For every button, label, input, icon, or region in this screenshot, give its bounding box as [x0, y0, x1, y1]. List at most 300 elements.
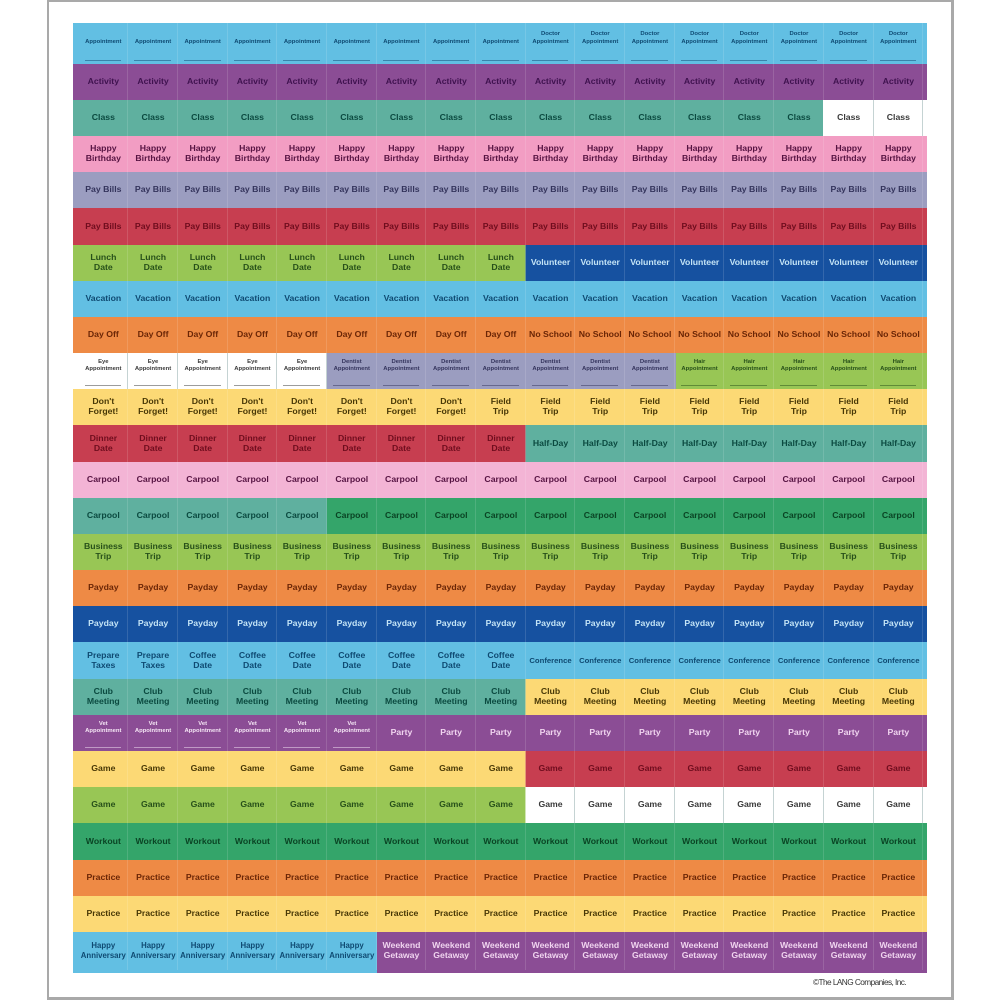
row: Appointment and Doctor Appointment: Appointment	[334, 39, 370, 45]
row: Appointment and Doctor Appointment: Doctor	[889, 31, 908, 37]
row: Eye, Dentist and Hair Appointment: Eye	[148, 359, 158, 365]
row: Lunch Date and Volunteer: Lunch	[90, 252, 116, 262]
row: Pay Bills red: Pay Bills	[284, 221, 320, 231]
row: Dinner Date and Half-Day: Date	[243, 442, 262, 452]
row: Appointment and Doctor Appointment: Appointment	[383, 39, 420, 45]
row: Vacation: Vacation	[533, 293, 568, 303]
row: Class: Class	[489, 112, 512, 122]
row: Practice orange: Practice	[583, 872, 617, 882]
row: Prepare Taxes, Coffee Date and Conference	[73, 642, 927, 679]
row: Pay Bills lavender: Pay Bills	[781, 184, 817, 194]
row: Appointment and Doctor Appointment: Doctor	[740, 31, 759, 37]
row: Day Off and No School: No School	[877, 329, 920, 339]
row: Class: Class	[638, 112, 662, 122]
row: Practice orange: Practice	[881, 872, 915, 882]
row: Carpool teal and green: Carpool	[87, 510, 120, 520]
row: Class: Class	[191, 112, 214, 122]
row: Happy Birthday: Birthday	[732, 153, 767, 163]
row: Happy Birthday: Happy	[537, 143, 564, 153]
row: Prepare Taxes, Coffee Date and Conference: Taxes	[91, 660, 115, 670]
row: Lunch Date and Volunteer: Date	[144, 262, 162, 272]
row: Business Trip: Trip	[294, 551, 310, 561]
row: Appointment and Doctor Appointment: Doctor	[839, 31, 858, 37]
row: Business Trip: Business	[332, 541, 371, 551]
row: Club Meeting: Meeting	[633, 696, 666, 706]
row: Lunch Date and Volunteer: Date	[342, 262, 361, 272]
row: Payday orange: Payday	[436, 582, 466, 592]
row: Don't Forget and Field Trip: Forget!	[138, 406, 168, 416]
row: Dinner Date and Half-Day: Dinner	[139, 433, 167, 443]
row: Payday blue: Payday	[535, 618, 566, 628]
row: Club Meeting: Club	[690, 686, 709, 696]
row: Eye, Dentist and Hair Appointment	[73, 353, 927, 389]
row: Happy Anniversary and Weekend Getaway: Anniversary	[81, 951, 126, 960]
row: Don't Forget and Field Trip: Don't	[391, 396, 412, 406]
row: Practice orange: Practice	[434, 872, 468, 882]
row: Game green and white: Game	[439, 799, 463, 809]
row: Game yellow and red: Game	[588, 763, 612, 773]
row: Lunch Date and Volunteer: Lunch	[488, 252, 514, 262]
row: Day Off and No School: No School	[777, 329, 820, 339]
row: Dinner Date and Half-Day: Date	[342, 442, 361, 452]
row: Dinner Date and Half-Day: Date	[144, 442, 162, 452]
row: Happy Birthday: Birthday	[434, 153, 469, 163]
row: Class: Class	[787, 112, 811, 122]
row: Prepare Taxes, Coffee Date and Conference: Conference	[678, 656, 721, 665]
row: Activity: Activity	[734, 76, 765, 86]
row: Happy Anniversary and Weekend Getaway: Getaway	[880, 950, 916, 960]
row: Don't Forget and Field Trip: Field	[590, 396, 610, 406]
row: Lunch Date and Volunteer: Lunch	[339, 252, 365, 262]
row: Club Meeting: Club	[243, 686, 262, 696]
row: Practice yellow: Practice	[434, 908, 468, 918]
row: Happy Anniversary and Weekend Getaway: Getaway	[384, 950, 419, 960]
row: Workout: Workout	[135, 836, 171, 846]
row: Workout: Workout	[434, 836, 469, 846]
row: Happy Anniversary and Weekend Getaway: Getaway	[731, 950, 767, 960]
row: Vacation	[73, 281, 927, 317]
row: Payday orange	[73, 570, 927, 606]
row: Game green and white: Game	[837, 799, 861, 809]
row: Business Trip: Business	[134, 541, 172, 551]
row: Game green and white: Game	[538, 799, 563, 809]
row: Game yellow and red: Game	[191, 763, 215, 773]
row: Dinner Date and Half-Day: Date	[193, 442, 212, 452]
row: Vet Appointment and Party: Vet	[298, 721, 306, 727]
row: Practice orange: Practice	[385, 872, 418, 882]
row: Prepare Taxes, Coffee Date and Conference: Prepare	[87, 650, 120, 660]
row: Vet Appointment and Party: Party	[540, 727, 561, 737]
row: Lunch Date and Volunteer: Lunch	[239, 252, 265, 262]
row: Dinner Date and Half-Day: Dinner	[189, 433, 216, 443]
row: Happy Anniversary and Weekend Getaway: Weekend	[830, 940, 868, 950]
row: Workout: Workout	[831, 836, 866, 846]
row: Happy Anniversary and Weekend Getaway: Weekend	[631, 940, 669, 950]
row: Prepare Taxes, Coffee Date and Conference: Date	[491, 660, 510, 670]
row: Class: Class	[340, 112, 363, 122]
row: Business Trip: Business	[482, 541, 520, 551]
row: Day Off and No School: No School	[529, 329, 572, 339]
row: Appointment and Doctor Appointment: Appointment	[135, 39, 171, 45]
row: Workout: Workout	[86, 836, 121, 846]
row: Lunch Date and Volunteer: Volunteer	[630, 257, 670, 267]
row: Payday blue: Payday	[88, 618, 119, 628]
row: Club Meeting: Club	[889, 686, 908, 696]
row: Practice yellow: Practice	[136, 908, 170, 918]
row: Happy Anniversary and Weekend Getaway: Happy	[141, 941, 165, 950]
row: Pay Bills lavender: Pay Bills	[632, 184, 668, 194]
row: Carpool teal and green: Carpool	[435, 510, 468, 520]
row: Happy Birthday: Happy	[239, 143, 266, 153]
row: Prepare Taxes, Coffee Date and Conference: Taxes	[141, 660, 165, 670]
row: Appointment and Doctor Appointment	[73, 23, 927, 64]
row: Carpool teal and green: Carpool	[783, 510, 815, 520]
row: Appointment and Doctor Appointment: Appointment	[830, 38, 867, 44]
row: Happy Birthday: Birthday	[583, 153, 618, 163]
row: Don't Forget and Field Trip: Forget!	[88, 406, 118, 416]
row: Don't Forget and Field Trip: Trip	[791, 406, 807, 416]
row: Vet Appointment and Party: Appointment	[135, 728, 171, 734]
row: Appointment and Doctor Appointment: Appointment	[483, 39, 519, 45]
copyright: ©The LANG Companies, Inc.	[813, 977, 906, 987]
row: Appointment and Doctor Appointment: Appointment	[681, 38, 718, 44]
row: Payday orange: Payday	[337, 582, 367, 592]
row: Lunch Date and Volunteer: Volunteer	[779, 257, 819, 267]
row: Eye, Dentist and Hair Appointment: Appointment	[781, 366, 817, 372]
row: Eye, Dentist and Hair Appointment: Dentist	[640, 359, 660, 365]
row: Game green and white: Game	[389, 799, 414, 809]
row: Club Meeting: Meeting	[832, 696, 865, 706]
row: Club Meeting: Meeting	[882, 696, 915, 706]
row: Eye, Dentist and Hair Appointment: Hair	[893, 359, 904, 365]
row: Happy Anniversary and Weekend Getaway: Getaway	[831, 950, 867, 960]
row: Game yellow and red: Game	[340, 763, 364, 773]
row: Practice yellow: Practice	[832, 908, 866, 918]
row: Happy Anniversary and Weekend Getaway: Getaway	[682, 950, 717, 960]
row: Lunch Date and Volunteer: Lunch	[289, 252, 315, 262]
row: Club Meeting: Club	[541, 686, 560, 696]
row: Payday blue: Payday	[337, 618, 367, 628]
row: Eye, Dentist and Hair Appointment: Hair	[694, 359, 705, 365]
row: Business Trip: Trip	[344, 551, 360, 561]
row: Club Meeting: Meeting	[385, 696, 418, 706]
row: Activity: Activity	[286, 76, 318, 86]
row: Business Trip: Trip	[145, 551, 161, 561]
row: Business Trip: Trip	[841, 551, 857, 561]
row: Happy Birthday: Birthday	[334, 153, 369, 163]
row: Don't Forget and Field Trip: Forget!	[237, 406, 267, 416]
row: Vet Appointment and Party: Appointment	[284, 728, 320, 734]
row: Carpool teal and green: Carpool	[633, 510, 666, 520]
row: Pay Bills red: Pay Bills	[85, 221, 121, 231]
row: Eye, Dentist and Hair Appointment: Appointment	[85, 366, 122, 372]
row: Prepare Taxes, Coffee Date and Conference: Conference	[778, 656, 820, 665]
row: Club Meeting: Club	[193, 686, 212, 696]
row: Eye, Dentist and Hair Appointment: Dentist	[441, 359, 461, 365]
row: Vet Appointment and Party: Vet	[248, 721, 257, 727]
row: Payday blue: Payday	[287, 618, 317, 628]
row: Workout: Workout	[682, 836, 717, 846]
row: Pay Bills red: Pay Bills	[483, 221, 519, 231]
row: Club Meeting: Meeting	[335, 696, 368, 706]
row: Practice orange: Practice	[335, 872, 369, 882]
row: Lunch Date and Volunteer: Date	[94, 262, 113, 272]
row: Class: Class	[141, 112, 165, 122]
row: Activity: Activity	[137, 76, 169, 86]
row: Don't Forget and Field Trip: Field	[839, 396, 859, 406]
row: Appointment and Doctor Appointment: Appointment	[532, 38, 569, 44]
row: Payday blue: Payday	[138, 618, 168, 628]
row: Pay Bills red	[73, 208, 927, 245]
row: Business Trip	[73, 534, 927, 570]
row: Business Trip: Business	[581, 541, 620, 551]
row: Don't Forget and Field Trip: Trip	[741, 406, 757, 416]
row: Game yellow and red: Game	[489, 763, 513, 773]
row: Happy Birthday: Birthday	[632, 153, 668, 163]
row: Club Meeting: Meeting	[286, 696, 318, 706]
row: Business Trip: Business	[879, 541, 918, 551]
row: Business Trip: Business	[183, 541, 222, 551]
row: Happy Anniversary and Weekend Getaway: Happy	[340, 941, 364, 950]
row: Don't Forget and Field Trip: Don't	[440, 396, 462, 406]
row: Vet Appointment and Party: Party	[440, 727, 462, 737]
row: Payday orange: Payday	[635, 582, 665, 592]
row: Business Trip: Trip	[443, 551, 459, 561]
row: Activity: Activity	[585, 76, 616, 86]
row: Carpool pink: Carpool	[186, 474, 219, 484]
row: Practice orange: Practice	[86, 872, 120, 882]
row: Pay Bills lavender: Pay Bills	[234, 184, 271, 194]
row: Game green and white: Game	[340, 799, 364, 809]
row: Pay Bills lavender: Pay Bills	[831, 184, 867, 194]
row: Carpool teal and green: Carpool	[832, 510, 865, 520]
row: Vet Appointment and Party: Party	[738, 727, 760, 737]
row: Don't Forget and Field Trip: Forget!	[188, 406, 218, 416]
row: Vacation: Vacation	[731, 293, 767, 303]
row: Activity: Activity	[833, 76, 864, 86]
row: Business Trip: Trip	[642, 551, 658, 561]
row: Pay Bills lavender: Pay Bills	[334, 184, 370, 194]
row: Eye, Dentist and Hair Appointment: Appointment	[185, 366, 221, 372]
row: Day Off and No School: No School	[827, 329, 870, 339]
row: Class: Class	[688, 112, 711, 122]
row: Business Trip: Business	[84, 541, 123, 551]
row: Happy Birthday: Birthday	[831, 153, 866, 163]
row: Prepare Taxes, Coffee Date and Conference: Conference	[629, 656, 671, 665]
row: Lunch Date and Volunteer: Lunch	[438, 252, 464, 262]
row: Prepare Taxes, Coffee Date and Conference: Coffee	[487, 650, 514, 660]
row: Carpool pink: Carpool	[87, 474, 120, 484]
row: Pay Bills red: Pay Bills	[135, 221, 171, 231]
row: Game yellow and red: Game	[439, 763, 463, 773]
row: Prepare Taxes, Coffee Date and Conference: Conference	[529, 656, 572, 665]
row: Business Trip: Business	[531, 541, 570, 551]
row: Payday orange: Payday	[535, 582, 566, 592]
row: Happy Anniversary and Weekend Getaway: Weekend	[681, 940, 719, 950]
row: Workout: Workout	[483, 836, 518, 846]
row: Don't Forget and Field Trip: Don't	[142, 396, 164, 406]
row: Club Meeting: Club	[143, 686, 163, 696]
row: Don't Forget and Field Trip: Field	[888, 396, 908, 406]
row: Vet Appointment and Party: Party	[589, 727, 611, 737]
row: Payday blue: Payday	[635, 618, 665, 628]
row: Club Meeting: Meeting	[435, 696, 468, 706]
row: Club Meeting: Club	[342, 686, 361, 696]
row: Practice orange: Practice	[534, 872, 567, 882]
row: Class: Class	[738, 112, 761, 122]
row: Practice yellow: Practice	[732, 908, 766, 918]
row: Activity: Activity	[237, 76, 268, 86]
row: Carpool teal and green: Carpool	[286, 510, 318, 520]
row: Workout: Workout	[632, 836, 667, 846]
row: Workout: Workout	[334, 836, 369, 846]
row: Carpool pink: Carpool	[683, 474, 716, 484]
row: Happy Birthday: Happy	[686, 143, 713, 153]
row: Practice orange: Practice	[832, 872, 866, 882]
row: Pay Bills red: Pay Bills	[632, 221, 668, 231]
row: Prepare Taxes, Coffee Date and Conference: Date	[193, 660, 212, 670]
row: Appointment and Doctor Appointment: Doctor	[789, 31, 808, 37]
row: Prepare Taxes, Coffee Date and Conference: Date	[293, 660, 312, 670]
row: Game green and white: Game	[240, 799, 264, 809]
row: Lunch Date and Volunteer: Lunch	[190, 252, 216, 262]
row: Prepare Taxes, Coffee Date and Conference: Coffee	[338, 650, 365, 660]
row: Day Off and No School: Day Off	[336, 329, 367, 339]
row: Class: Class	[440, 112, 463, 122]
row: Vet Appointment and Party: Party	[788, 727, 810, 737]
row: Pay Bills lavender: Pay Bills	[731, 184, 767, 194]
row: Activity: Activity	[336, 76, 367, 86]
row: Carpool teal and green: Carpool	[683, 510, 716, 520]
row: Vacation: Vacation	[781, 293, 817, 303]
row: Practice orange: Practice	[186, 872, 220, 882]
row: Club Meeting: Meeting	[534, 696, 567, 706]
row: Happy Anniversary and Weekend Getaway: Anniversary	[130, 951, 176, 960]
row: Happy Anniversary and Weekend Getaway: Happy	[290, 941, 314, 950]
row: Eye, Dentist and Hair Appointment: Appointment	[830, 366, 867, 372]
row: Happy Birthday: Happy	[438, 143, 464, 153]
row: Prepare Taxes, Coffee Date and Conference: Date	[243, 660, 262, 670]
row: Vacation: Vacation	[483, 293, 519, 303]
row: Club Meeting: Meeting	[137, 696, 169, 706]
row: Dinner Date and Half-Day: Half-Day	[881, 438, 916, 448]
row: Game green and white: Game	[737, 799, 761, 809]
row: Class: Class	[390, 112, 413, 122]
row: Don't Forget and Field Trip: Forget!	[436, 406, 466, 416]
row: Prepare Taxes, Coffee Date and Conference: Coffee	[438, 650, 465, 660]
row: Club Meeting: Meeting	[87, 696, 120, 706]
row: Carpool teal and green: Carpool	[335, 510, 368, 520]
row: Lunch Date and Volunteer: Volunteer	[580, 257, 620, 267]
row: Eye, Dentist and Hair Appointment: Appointment	[731, 366, 767, 372]
row: Carpool teal and green: Carpool	[484, 510, 517, 520]
row: Carpool pink: Carpool	[733, 474, 766, 484]
row: Lunch Date and Volunteer	[73, 245, 927, 281]
row: Don't Forget and Field Trip: Field	[640, 396, 660, 406]
row: Eye, Dentist and Hair Appointment: Dentist	[590, 359, 610, 365]
row: Activity: Activity	[435, 76, 467, 86]
row: Payday blue: Payday	[833, 618, 864, 628]
row: Pay Bills lavender: Pay Bills	[880, 184, 916, 194]
row: Happy Birthday: Birthday	[682, 153, 717, 163]
row: Payday orange: Payday	[287, 582, 317, 592]
row: Dinner Date and Half-Day: Half-Day	[781, 438, 817, 448]
row: Pay Bills red: Pay Bills	[185, 221, 221, 231]
row: Lunch Date and Volunteer: Date	[442, 262, 461, 272]
row: Payday orange: Payday	[237, 582, 268, 592]
row: Class: Class	[589, 112, 612, 122]
row: Payday blue: Payday	[486, 618, 516, 628]
row: Class: Class	[241, 112, 264, 122]
row: Activity	[73, 64, 927, 100]
row: Club Meeting: Club	[292, 686, 312, 696]
row: Day Off and No School: Day Off	[138, 329, 168, 339]
row: Dinner Date and Half-Day: Half-Day	[583, 438, 618, 448]
row: Practice orange: Practice	[683, 872, 716, 882]
row: Lunch Date and Volunteer: Volunteer	[879, 257, 918, 267]
row: Vet Appointment and Party: Party	[639, 727, 661, 737]
row: Pay Bills lavender: Pay Bills	[681, 184, 718, 194]
row: Practice orange: Practice	[136, 872, 170, 882]
row: Don't Forget and Field Trip: Don't	[192, 396, 214, 406]
row: Happy Birthday: Happy	[388, 143, 415, 153]
row: Eye, Dentist and Hair Appointment: Appointment	[483, 366, 519, 372]
row: Payday orange: Payday	[386, 582, 417, 592]
row: Practice yellow: Practice	[186, 908, 220, 918]
row: Payday orange: Payday	[684, 582, 715, 592]
row: Don't Forget and Field Trip: Field	[491, 396, 511, 406]
row: Don't Forget and Field Trip: Trip	[493, 406, 509, 416]
row: Happy Birthday: Happy	[736, 143, 763, 153]
row: Happy Birthday: Happy	[488, 143, 514, 153]
row: Game green and white: Game	[787, 799, 811, 809]
row: Carpool pink: Carpool	[335, 474, 368, 484]
row: Eye, Dentist and Hair Appointment: Appointment	[234, 366, 271, 372]
row: Pay Bills red: Pay Bills	[681, 221, 718, 231]
row: Lunch Date and Volunteer: Lunch	[388, 252, 414, 262]
row: Practice yellow: Practice	[385, 908, 418, 918]
row: Eye, Dentist and Hair Appointment: Appointment	[433, 366, 469, 372]
row: Dinner Date and Half-Day: Date	[491, 442, 510, 452]
row: Club Meeting: Meeting	[484, 696, 517, 706]
row: Vacation: Vacation	[135, 293, 171, 303]
row: Prepare Taxes, Coffee Date and Conference: Coffee	[289, 650, 316, 660]
row: Happy Anniversary and Weekend Getaway: Weekend	[879, 940, 917, 950]
row: Class: Class	[837, 112, 860, 122]
row: Lunch Date and Volunteer: Date	[293, 262, 312, 272]
row: Payday orange: Payday	[883, 582, 914, 592]
row: Don't Forget and Field Trip: Forget!	[386, 406, 416, 416]
row: Pay Bills lavender: Pay Bills	[433, 184, 469, 194]
row: Don't Forget and Field Trip: Trip	[841, 406, 857, 416]
row: Prepare Taxes, Coffee Date and Conference: Date	[342, 660, 361, 670]
row: Game yellow and red: Game	[240, 763, 264, 773]
row: Payday blue: Payday	[436, 618, 466, 628]
row: Dinner Date and Half-Day: Date	[293, 442, 312, 452]
row: Appointment and Doctor Appointment: Doctor	[690, 31, 709, 37]
row: Game green and white: Game	[886, 799, 910, 809]
row: Pay Bills red: Pay Bills	[383, 221, 420, 231]
row: Vet Appointment and Party: Vet	[149, 721, 157, 727]
row: Happy Birthday: Happy	[885, 143, 912, 153]
row: Dinner Date and Half-Day: Dinner	[288, 433, 316, 443]
row: Club Meeting	[73, 679, 927, 715]
row: Carpool teal and green: Carpool	[236, 510, 269, 520]
row: Activity: Activity	[684, 76, 715, 86]
row: Payday blue	[73, 606, 927, 642]
row: Pay Bills red: Pay Bills	[731, 221, 767, 231]
row: Happy Birthday	[73, 136, 927, 172]
